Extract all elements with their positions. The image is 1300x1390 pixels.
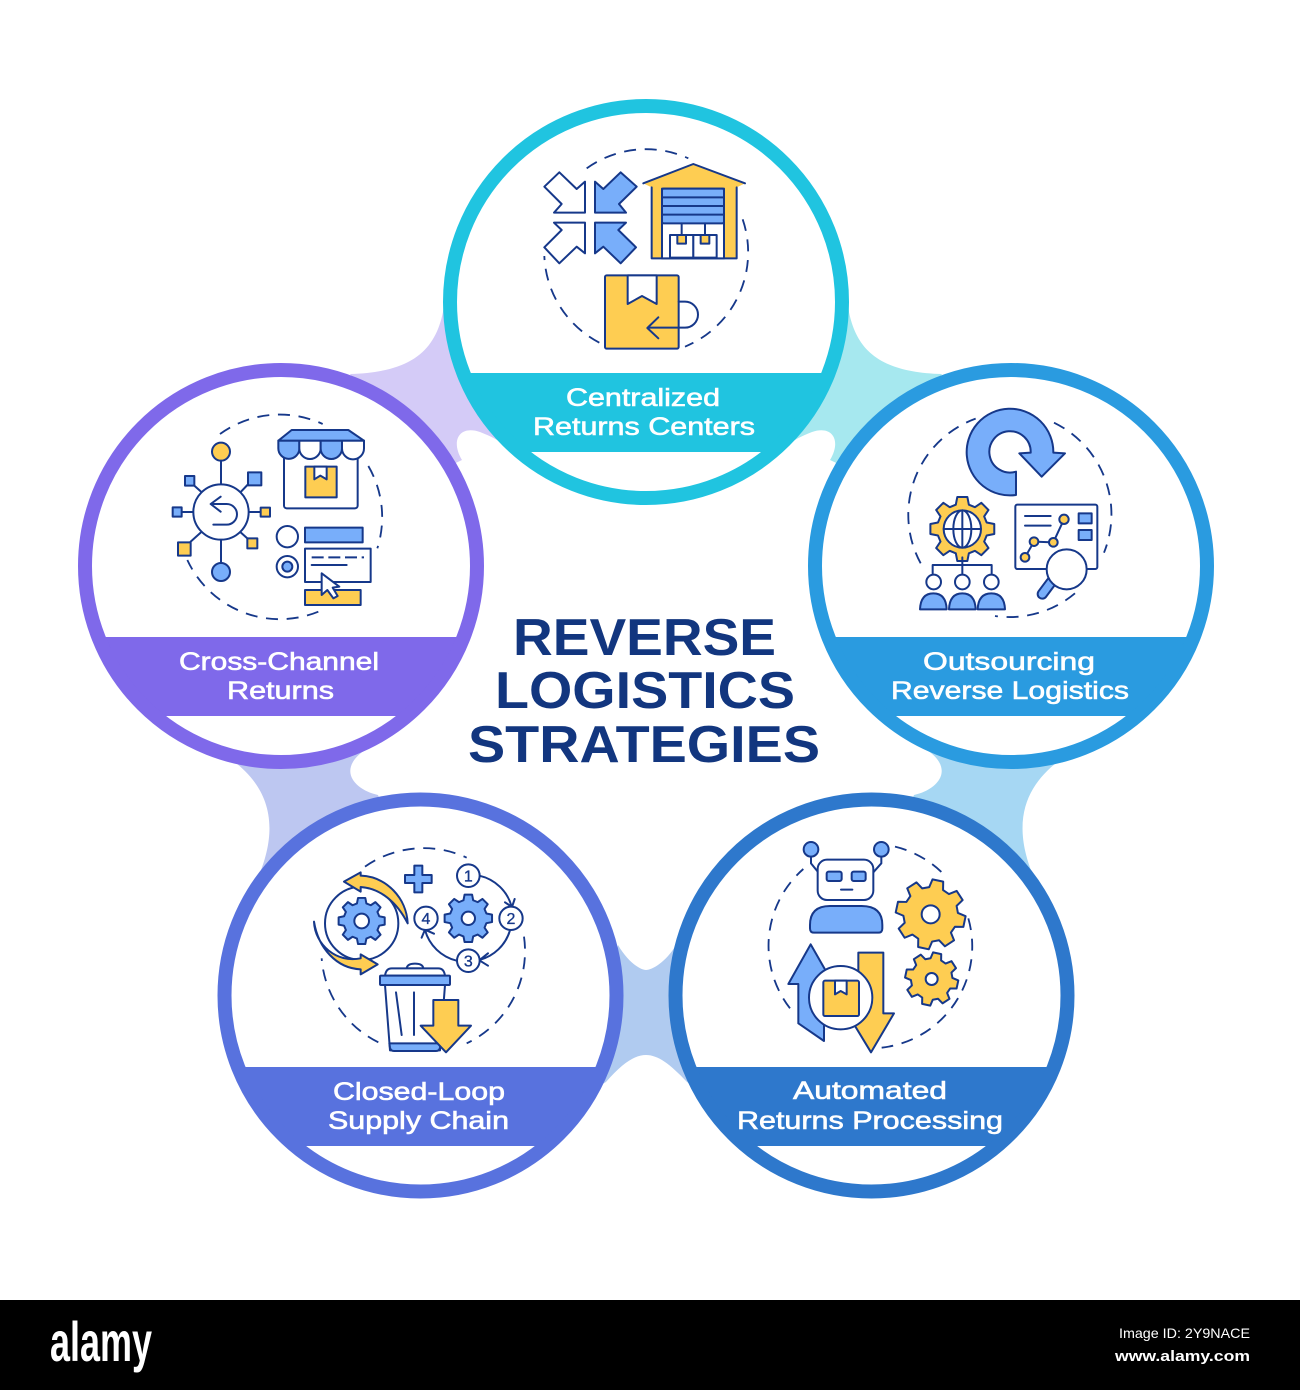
connector: left to bottom left <box>225 750 400 880</box>
title: LOGISTICS <box>495 662 795 720</box>
label text: Returns Processing <box>737 1107 1003 1135</box>
label text: Returns <box>227 677 334 705</box>
panel: Outsourcing Reverse Logistics <box>805 370 1225 762</box>
icon: warehouse, arrows and return box <box>544 149 748 349</box>
label text: Cross-Channel <box>179 648 379 676</box>
label text: Automated <box>793 1077 947 1105</box>
panel: Cross-Channel Returns <box>75 370 495 762</box>
title: STRATEGIES <box>468 716 820 774</box>
label band <box>696 1067 1046 1146</box>
panel: Centralized Returns Centers <box>440 106 860 498</box>
footer bar <box>0 1300 1300 1390</box>
footer url: www.alamy.com <box>1114 1348 1250 1365</box>
icon: channel hub, store and order form <box>173 415 382 619</box>
label band <box>246 1067 596 1146</box>
footer image id: Image ID: 2Y9NACE <box>1119 1325 1250 1341</box>
panel: Automated Returns Processing <box>665 800 1085 1192</box>
icon: recycling loop, numbered process and bin: 4 <box>422 911 431 928</box>
icon: robot, gears and package flow <box>769 842 972 1052</box>
icon: recycling loop, numbered process and bin: 1 <box>464 868 473 885</box>
title <box>468 609 820 774</box>
footer logo: alamy <box>50 1310 152 1373</box>
label band <box>836 637 1186 716</box>
icon: recycling loop, numbered process and bin: 2 <box>507 911 516 928</box>
connector: top to left <box>350 290 510 480</box>
label text: Closed-Loop <box>333 1078 505 1106</box>
icon: recycling loop, numbered process and bin <box>314 848 525 1052</box>
label text: Reverse Logistics <box>891 677 1129 705</box>
icon: cycle arrow, global gear, team and analytics <box>908 409 1111 617</box>
label text: Supply Chain <box>328 1107 509 1135</box>
label text: Outsourcing <box>923 648 1095 676</box>
connector: top to right <box>782 290 942 480</box>
panel: Closed-Loop Supply Chain <box>215 800 635 1192</box>
label text: Centralized <box>566 384 720 412</box>
label band <box>470 373 822 452</box>
title: REVERSE <box>513 609 776 667</box>
label band <box>106 637 456 716</box>
connector: bottom left to bottom right <box>592 945 700 1090</box>
label text: Returns Centers <box>533 413 755 441</box>
icon: recycling loop, numbered process and bin: 3 <box>464 953 473 970</box>
connector: right to bottom right <box>892 750 1067 880</box>
